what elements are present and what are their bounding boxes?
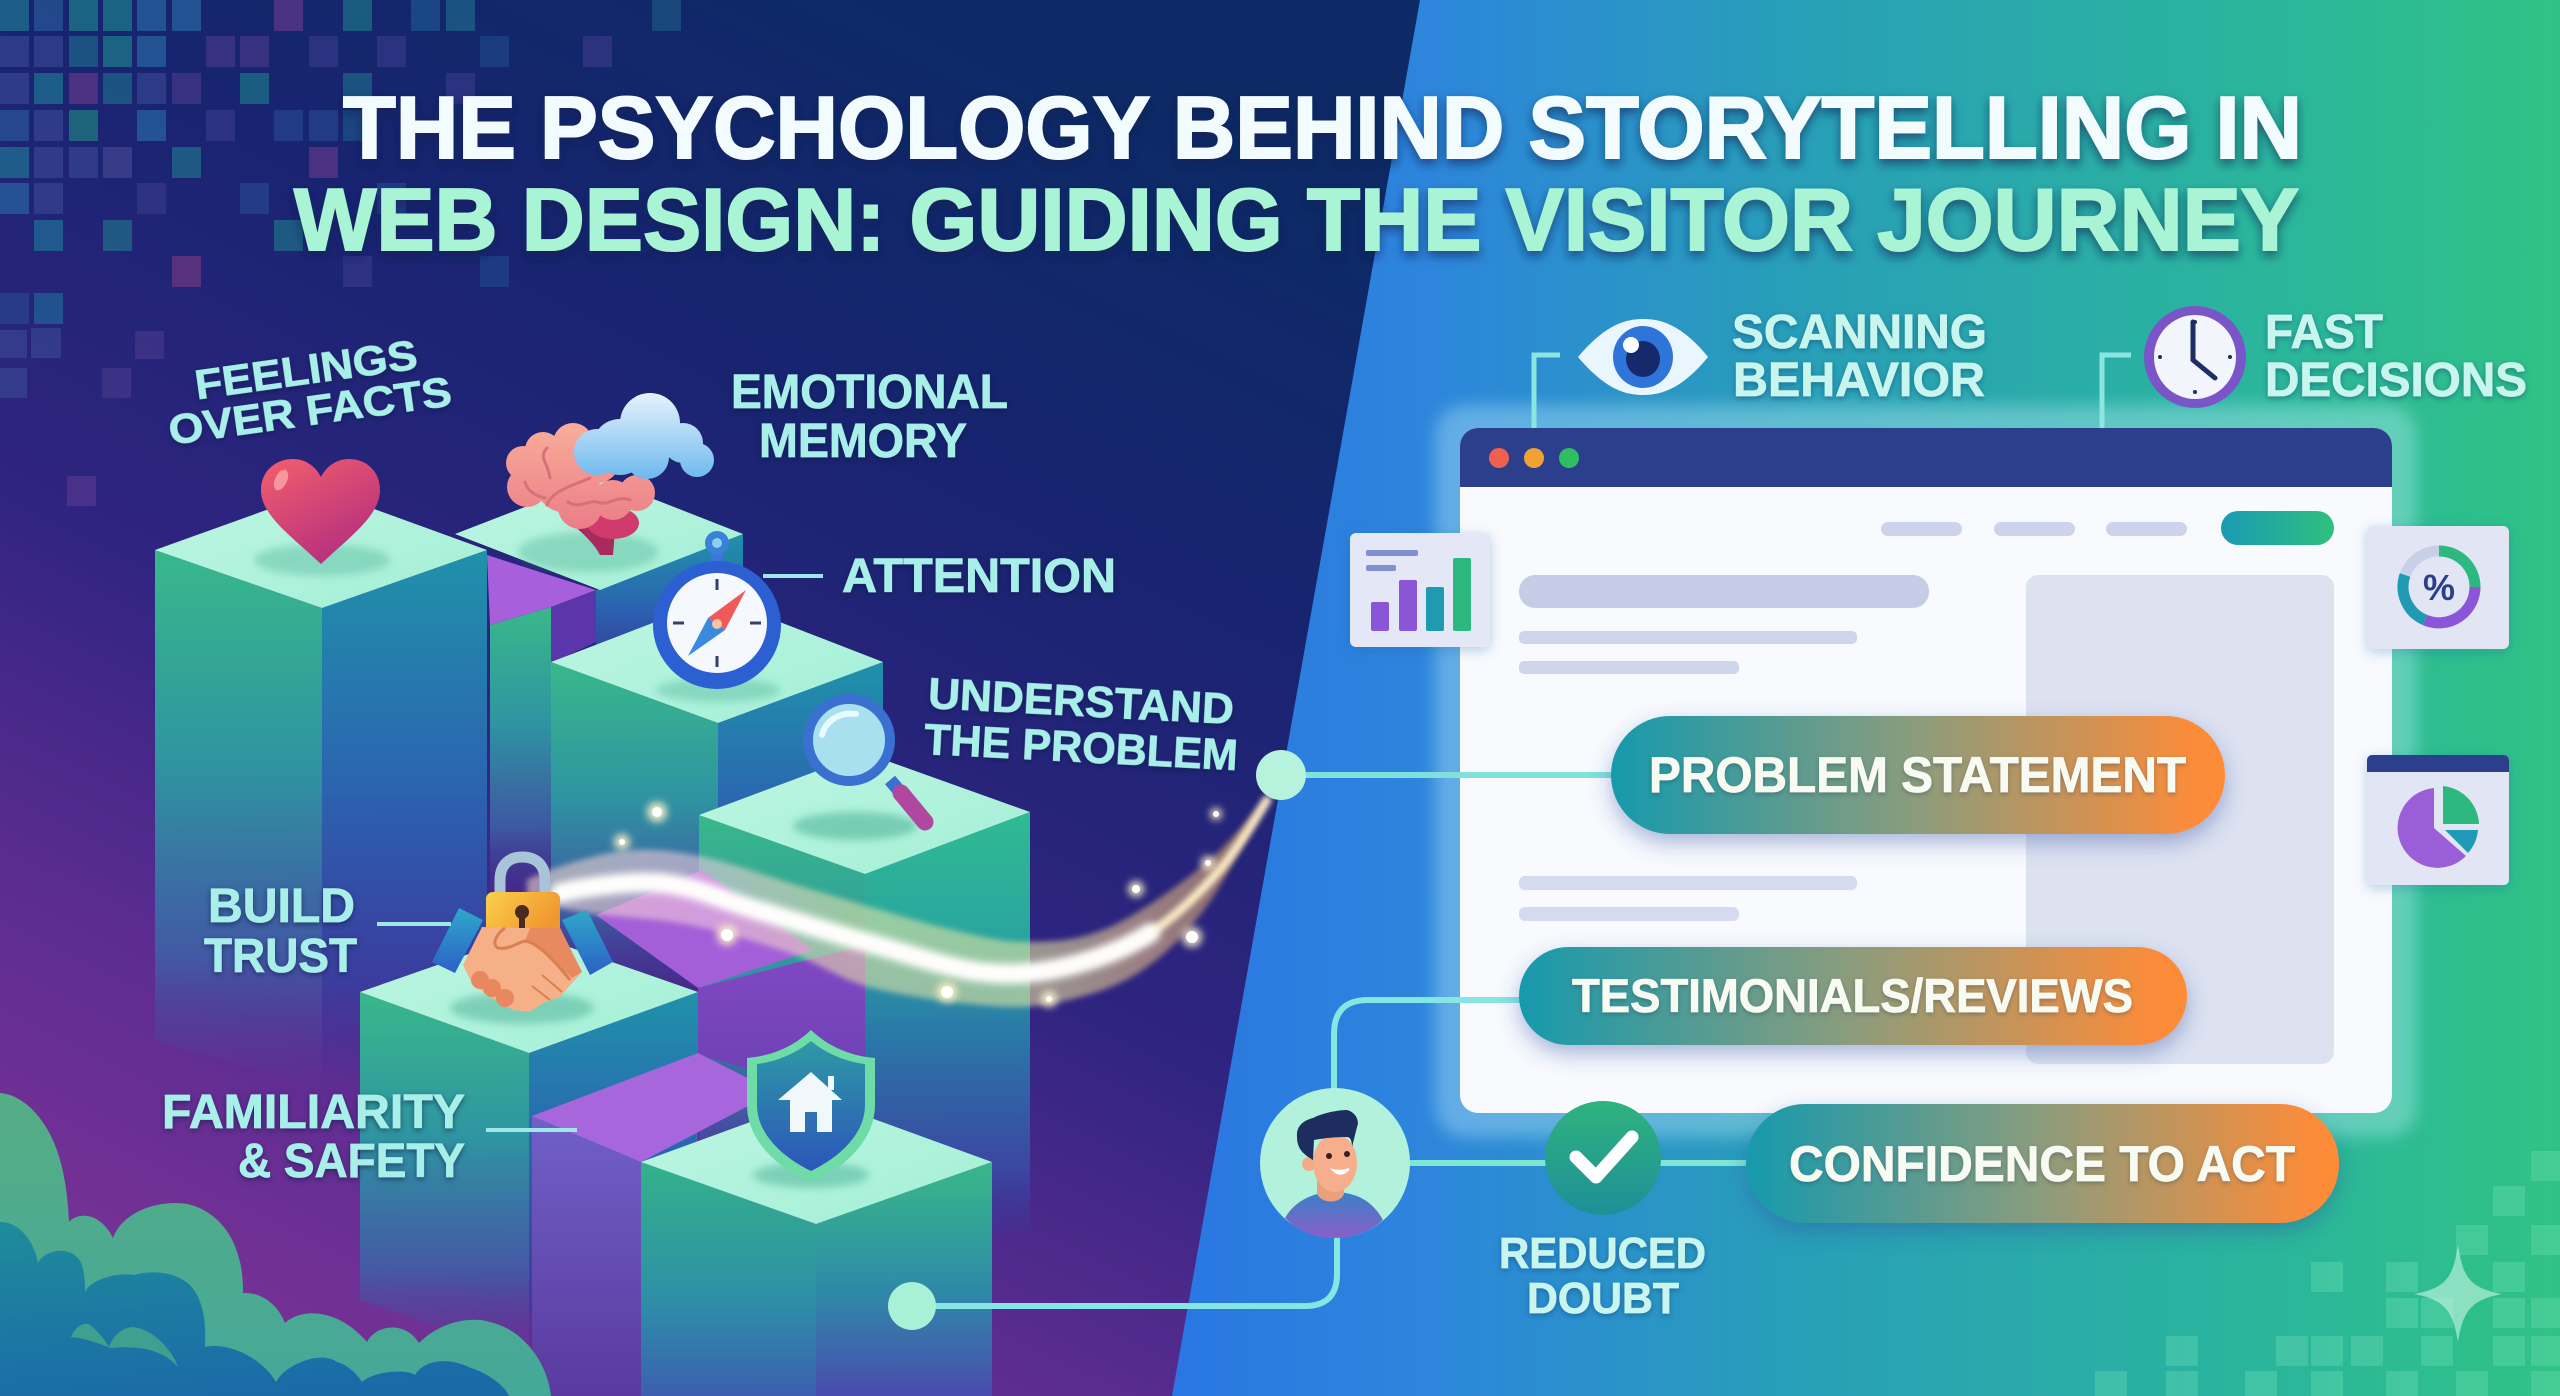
icon: visitor avatar — [1260, 1088, 1410, 1238]
icon: check badge — [1545, 1101, 1661, 1215]
step: understand block — [699, 753, 1030, 1260]
icon: padlock and handshake — [432, 857, 613, 1012]
label: feelings over facts — [166, 331, 454, 454]
icon: sparkle star — [2414, 1245, 2502, 1342]
decorative pixel grid: bottom right — [2095, 1151, 2560, 1396]
step: emotional memory block — [455, 478, 743, 900]
card: percent donut: % — [2423, 567, 2455, 608]
icon: shield with house — [747, 1030, 875, 1182]
icon: heart — [261, 459, 380, 564]
step: trust block — [360, 933, 698, 1360]
label: understand the problem — [923, 669, 1239, 780]
label: build trust: TRUST — [204, 930, 357, 983]
icon: clock — [2144, 306, 2246, 408]
label: familiarity and safety — [162, 1086, 577, 1188]
callout pill: confidence to act: CONFIDENCE TO ACT — [1789, 1136, 2295, 1192]
staircase of isometric columns — [155, 478, 1030, 1396]
label: familiarity and safety: & SAFETY — [238, 1135, 465, 1188]
lower placeholder text — [1519, 876, 1857, 921]
nav button — [2221, 511, 2334, 545]
icon: eye — [1578, 319, 1708, 395]
card: pie chart — [2367, 755, 2509, 885]
panel: bright right side — [1172, 0, 2560, 1396]
clouds: bottom left — [0, 1093, 551, 1396]
label: scanning behavior: SCANNING — [1732, 306, 1987, 359]
label: emotional memory: EMOTIONAL — [731, 366, 1008, 419]
icon: brain with cloud — [506, 393, 714, 555]
sparkles along ribbon — [614, 802, 1222, 1007]
label: emotional memory — [731, 366, 1008, 468]
label: attention: ATTENTION — [842, 550, 1116, 603]
connector: testimonials to avatar to step node — [888, 1000, 1525, 1330]
label: scanning behavior: BEHAVIOR — [1733, 354, 1985, 407]
title — [294, 78, 2302, 269]
nav placeholder pills — [1881, 522, 2187, 536]
callout pill: problem statement — [1611, 716, 2225, 834]
icon: compass — [653, 531, 781, 689]
title: THE PSYCHOLOGY BEHIND STORYTELLING IN — [343, 78, 2302, 177]
label: fast decisions: DECISIONS — [2265, 354, 2527, 407]
connector brackets to browser — [1534, 355, 2131, 428]
step: feelings block — [155, 490, 487, 1090]
flowing light ribbon — [527, 797, 1267, 1007]
label: reduced doubt: DOUBT — [1527, 1274, 1679, 1323]
connector: ribbon node to problem statement — [1256, 750, 1615, 800]
window control dots — [1489, 448, 1579, 468]
title: WEB DESIGN: GUIDING THE VISITOR JOURNEY — [294, 170, 2299, 269]
callout pill: problem statement: PROBLEM STATEMENT — [1649, 747, 2186, 803]
panel: browser window — [1460, 428, 2392, 1113]
label: understand the problem: UNDERSTAND — [927, 669, 1235, 734]
step: familiarity block — [641, 1098, 992, 1396]
label: reduced doubt — [1499, 1229, 1706, 1323]
label: build trust: BUILD — [208, 880, 355, 933]
step: purple lower landing — [532, 1053, 775, 1396]
label: familiarity and safety: FAMILIARITY — [162, 1086, 465, 1139]
label: understand the problem: THE PROBLEM — [923, 715, 1239, 780]
callout pill: testimonials: TESTIMONIALS/REVIEWS — [1572, 969, 2133, 1022]
browser glow — [1435, 405, 2417, 1137]
connector: avatar through check to confidence — [1405, 1160, 1750, 1166]
label: emotional memory: MEMORY — [759, 415, 967, 468]
decorative pixel grid: top left — [0, 0, 681, 506]
card: bar chart — [1350, 533, 1490, 647]
labels: left column steps — [162, 331, 1239, 1188]
step: purple landing — [596, 870, 865, 1100]
label: reduced doubt: REDUCED — [1499, 1229, 1706, 1278]
label: feelings over facts: OVER FACTS — [166, 367, 454, 454]
label: fast decisions — [2265, 306, 2527, 407]
callout pill: testimonials — [1519, 947, 2187, 1045]
step: attention block — [551, 598, 883, 1000]
label: build trust — [204, 880, 451, 983]
label: feelings over facts: FEELINGS — [192, 331, 420, 408]
icon: magnifying glass — [808, 699, 925, 822]
sidebar placeholder — [2026, 575, 2334, 1064]
hero placeholder text — [1519, 575, 1929, 674]
label: scanning behavior — [1732, 306, 1987, 407]
background: dark left panel — [0, 0, 1440, 1396]
card: percent donut — [2367, 526, 2509, 649]
label: fast decisions: FAST — [2265, 306, 2383, 359]
browser title bar — [1460, 428, 2392, 487]
callout pill: confidence to act — [1746, 1104, 2339, 1223]
